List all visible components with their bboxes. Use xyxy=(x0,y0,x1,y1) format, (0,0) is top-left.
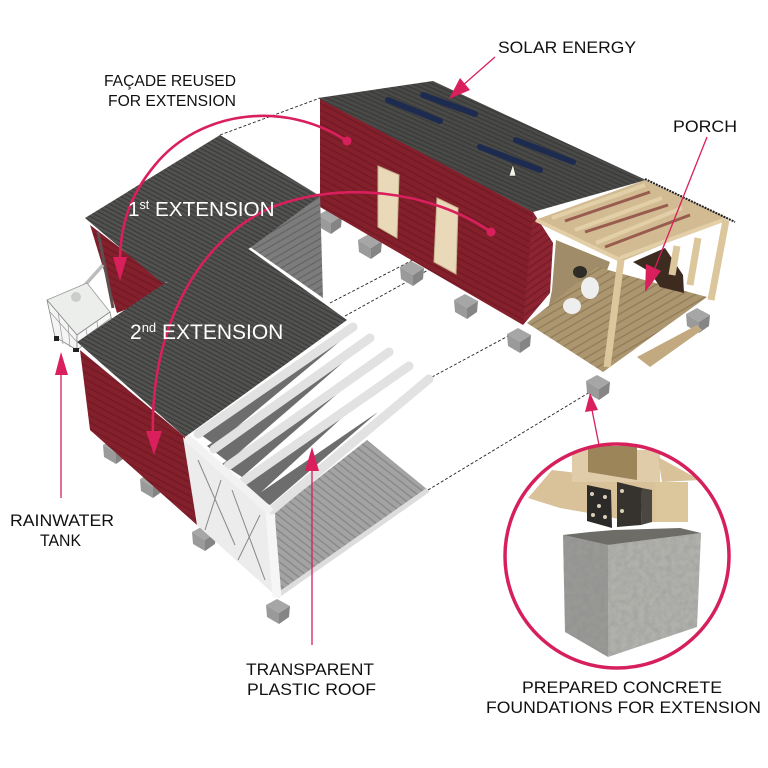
window 1 xyxy=(378,166,399,238)
arc arrow: second extension façade xyxy=(146,192,496,455)
label: second extension: nd xyxy=(142,320,156,335)
second extension xyxy=(77,245,429,624)
porch back wall xyxy=(545,240,610,325)
foundation blocks: second extension xyxy=(103,439,290,624)
first extension xyxy=(85,135,323,313)
window 2 xyxy=(434,198,458,274)
label: second extension: EXTENSION xyxy=(156,321,283,344)
foundation detail circle xyxy=(505,444,729,668)
label: transparent plastic roof xyxy=(246,660,376,699)
red wall: first extension xyxy=(90,225,175,313)
solar panels xyxy=(388,95,573,170)
label: rainwater tank: TANK xyxy=(40,531,82,550)
label: façade reused: FOR EXTENSION xyxy=(108,93,236,110)
label: rainwater tank: RAINWATER xyxy=(10,511,114,530)
label: first extension: EXTENSION xyxy=(149,198,275,221)
arc arrow: first extension façade xyxy=(113,116,352,281)
front beam xyxy=(186,437,271,512)
main house xyxy=(318,81,710,400)
label: solar energy: SOLAR ENERGY xyxy=(498,38,636,57)
main roof xyxy=(318,81,646,212)
porch posts xyxy=(607,220,726,367)
block top opening xyxy=(563,528,701,545)
pointer: transparent plastic roof xyxy=(305,447,319,645)
corner post xyxy=(270,512,277,597)
pink ring xyxy=(505,444,729,668)
dashed projection lines xyxy=(220,98,590,490)
rainwater tank icon xyxy=(47,265,112,352)
chairs xyxy=(563,266,599,314)
porch xyxy=(527,179,735,372)
roof: first extension xyxy=(85,135,320,283)
label: first extension: 1 xyxy=(128,198,140,221)
foundation blocks: main house xyxy=(318,209,710,400)
label: transparent plastic roof: PLASTIC ROOF xyxy=(247,680,376,699)
pointer: porch xyxy=(645,137,707,292)
label: foundations xyxy=(486,678,761,717)
label: first extension: st xyxy=(140,198,150,212)
plastic roof shadow strips xyxy=(197,333,383,505)
pointer: solar energy xyxy=(449,57,495,99)
gray reused wall xyxy=(240,194,323,298)
white frame xyxy=(183,437,277,597)
roof vent xyxy=(509,164,516,176)
white beams xyxy=(198,327,429,510)
pointer: rainwater tank xyxy=(55,352,68,498)
pointer: foundations xyxy=(585,393,599,445)
label: rainwater tank xyxy=(10,511,114,550)
label: second extension: 2 xyxy=(130,321,142,344)
drain pipe xyxy=(98,232,113,308)
metal brackets xyxy=(587,482,652,528)
porch deck xyxy=(527,267,707,372)
red wall: second extension xyxy=(80,350,197,525)
floor edge xyxy=(277,490,428,596)
label: foundations: PREPARED CONCRETE xyxy=(522,678,722,697)
deck steps xyxy=(637,325,702,367)
red long façade xyxy=(320,98,553,325)
gray floor xyxy=(275,440,428,595)
label: façade reused: FAÇADE REUSED xyxy=(104,73,236,90)
label: porch: PORCH xyxy=(673,117,737,136)
label: foundations: FOUNDATIONS FOR EXTENSION xyxy=(486,698,761,717)
roof: second extension xyxy=(77,245,347,437)
red end wall xyxy=(523,212,553,325)
label: transparent plastic roof: TRANSPARENT xyxy=(246,660,374,679)
porch roof beams xyxy=(535,180,728,262)
label: façade reused xyxy=(104,73,236,110)
firewood pile xyxy=(633,248,684,293)
timber beams xyxy=(528,446,700,522)
corrugated transparent sheet edge xyxy=(645,179,735,222)
concrete block xyxy=(563,533,701,657)
